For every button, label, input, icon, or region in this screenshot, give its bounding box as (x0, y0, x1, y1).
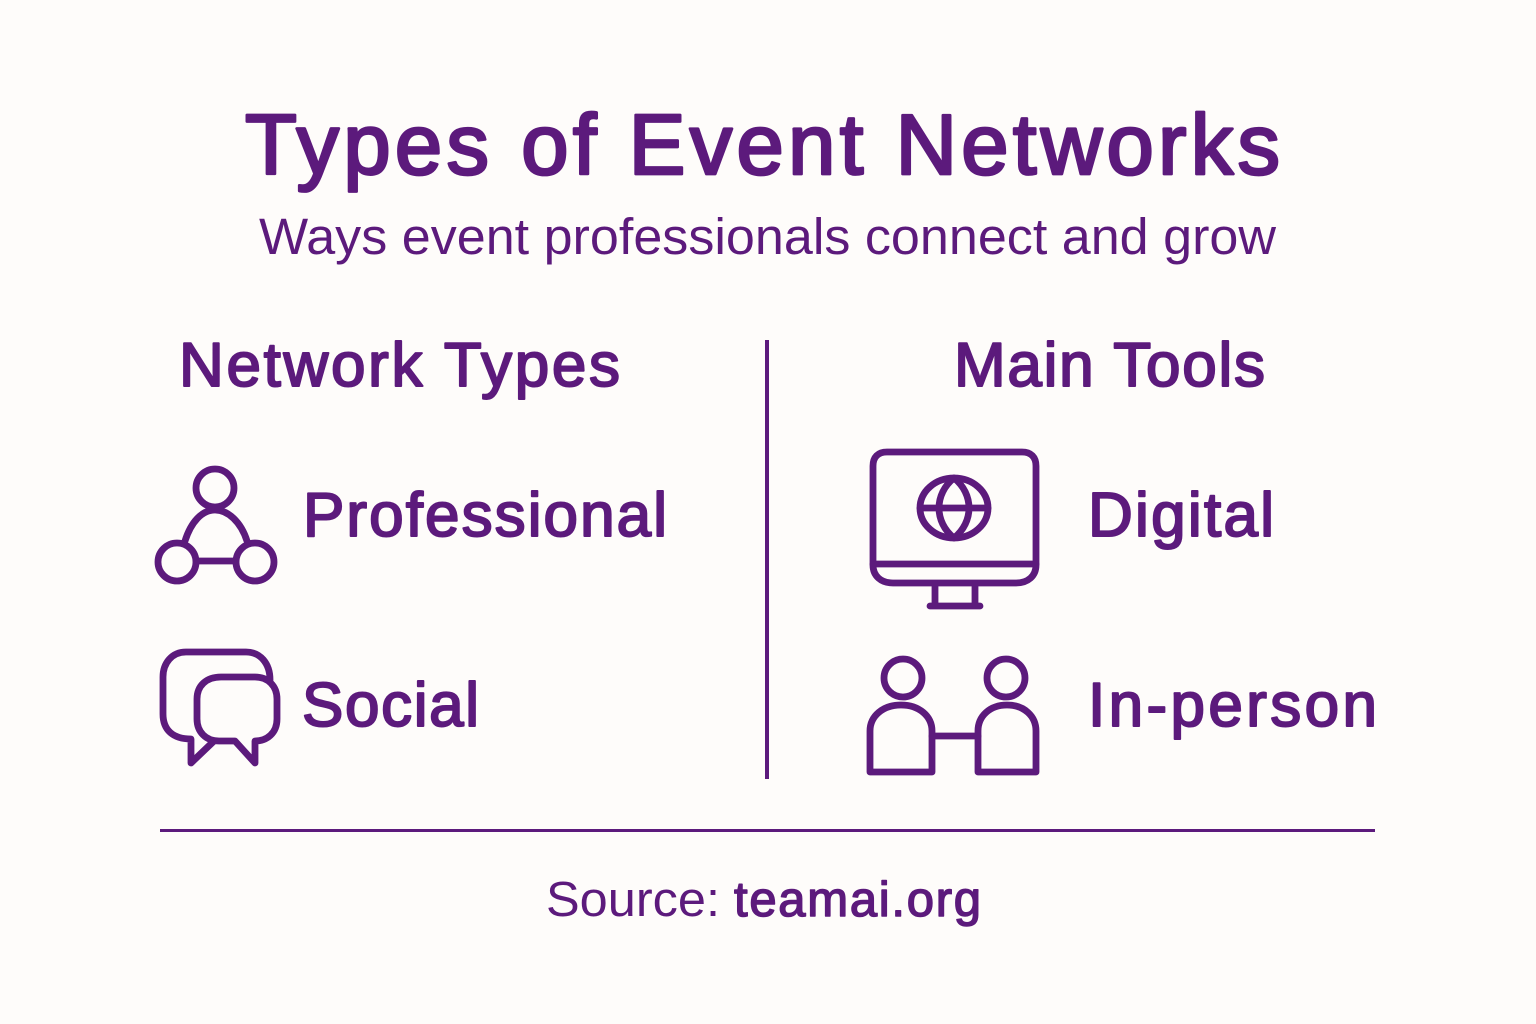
label: in-person: In-person (1088, 671, 1377, 740)
source line (546, 873, 981, 927)
vertical divider (765, 340, 769, 779)
label: social: Social (302, 671, 479, 740)
label: professional: Professional (303, 481, 667, 550)
subtitle: Ways event professionals connect and grow (259, 208, 1276, 265)
title: Types of Event Networks (245, 98, 1280, 193)
label: digital: Digital (1088, 481, 1274, 550)
heading: network types: Network Types (179, 331, 620, 400)
source line: Source: (546, 873, 720, 927)
heading: main tools: Main Tools (954, 331, 1265, 400)
icon: professional network (158, 469, 274, 581)
icon: social chat bubbles (163, 652, 277, 763)
footer rule (160, 829, 1375, 832)
source line: teamai.org (734, 873, 981, 927)
icon: in-person meeting (870, 659, 1036, 772)
icon: digital monitor with globe (873, 452, 1036, 606)
